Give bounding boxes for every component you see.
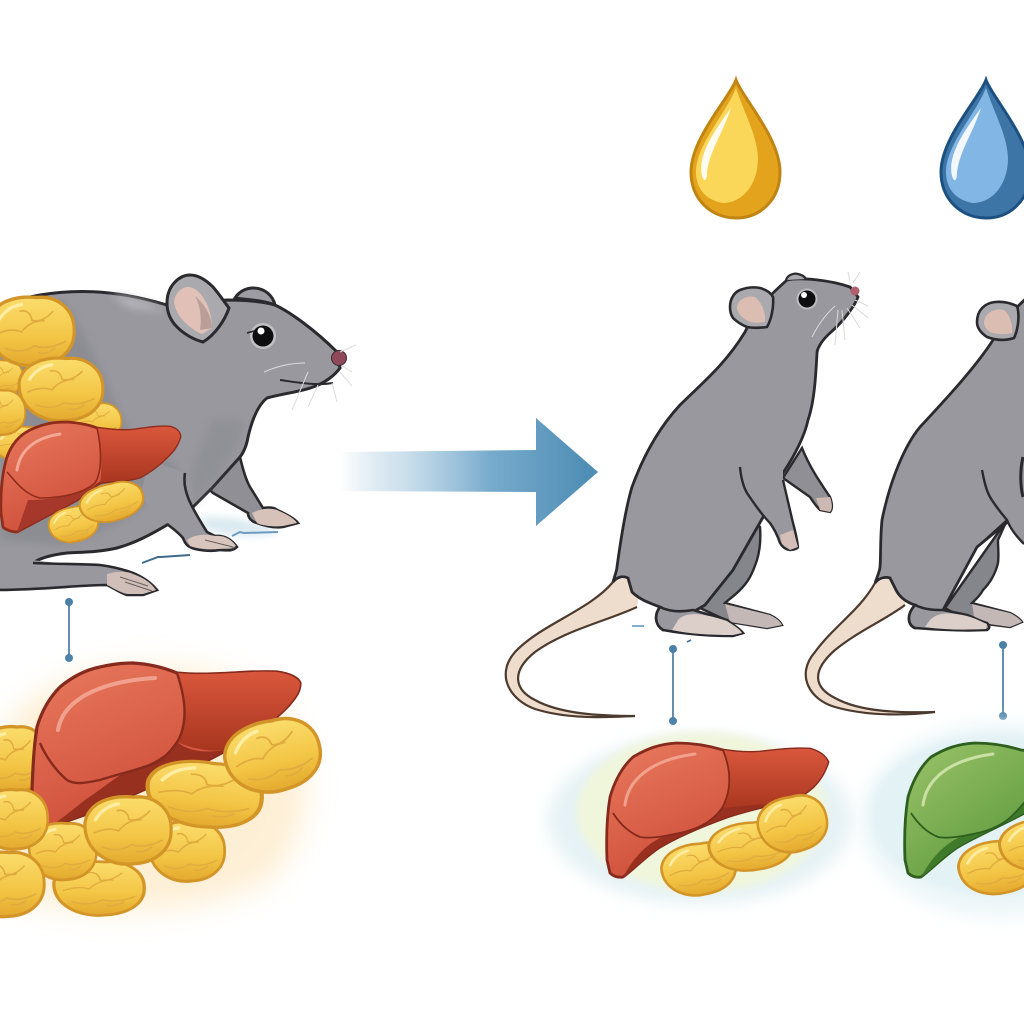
hind leg bbox=[0, 555, 157, 595]
shadow marks on ground bbox=[200, 517, 280, 536]
ear bbox=[167, 275, 229, 342]
far ear bbox=[235, 288, 275, 305]
connector left bbox=[65, 598, 73, 662]
eye bbox=[796, 288, 818, 310]
liver on rat bbox=[1, 422, 180, 532]
far ear bbox=[786, 274, 806, 280]
fat under liver bbox=[46, 477, 147, 547]
nose bbox=[332, 350, 346, 366]
far leg bbox=[700, 510, 782, 628]
glow bbox=[0, 666, 306, 911]
mouth and whiskers bbox=[264, 345, 356, 410]
upright rat two bbox=[806, 295, 1024, 714]
near foot bbox=[909, 605, 989, 630]
arrow bbox=[340, 418, 598, 526]
body bbox=[613, 279, 858, 630]
body shading bbox=[0, 294, 245, 545]
left obese rat with fat and liver bbox=[0, 275, 356, 595]
nose bbox=[850, 286, 860, 296]
arm bbox=[977, 457, 1024, 547]
ear bbox=[730, 287, 773, 328]
far leg bbox=[945, 520, 1022, 627]
body bbox=[875, 295, 1024, 628]
near foot bbox=[656, 607, 743, 636]
whiskers bbox=[812, 272, 868, 345]
ear bbox=[977, 302, 1018, 340]
connector rat two bbox=[999, 641, 1007, 720]
eye bbox=[247, 323, 276, 349]
body bbox=[0, 291, 340, 563]
fat lobes bbox=[149, 822, 225, 881]
yellow oil drop bbox=[691, 80, 780, 218]
connector rat one bbox=[669, 645, 677, 725]
liver bbox=[607, 743, 828, 877]
fat lobes on rat bbox=[0, 297, 121, 463]
red liver with small fat bbox=[548, 732, 852, 904]
front leg bbox=[140, 460, 237, 551]
tail bbox=[506, 578, 640, 717]
tail bbox=[806, 578, 935, 714]
glow bbox=[860, 722, 1024, 918]
near arm bbox=[740, 467, 798, 550]
far leg bbox=[200, 457, 298, 527]
fat behind bbox=[0, 727, 48, 792]
large liver with fat bbox=[0, 663, 327, 917]
green liver with small fat bbox=[860, 722, 1024, 918]
fat bbox=[659, 839, 739, 900]
far arm bbox=[783, 448, 832, 512]
blue oil drop bbox=[941, 80, 1024, 218]
upright rat one bbox=[506, 272, 868, 717]
liver bbox=[905, 743, 1024, 877]
fat bbox=[956, 836, 1024, 899]
glow bbox=[548, 732, 852, 904]
liver bbox=[32, 663, 300, 827]
